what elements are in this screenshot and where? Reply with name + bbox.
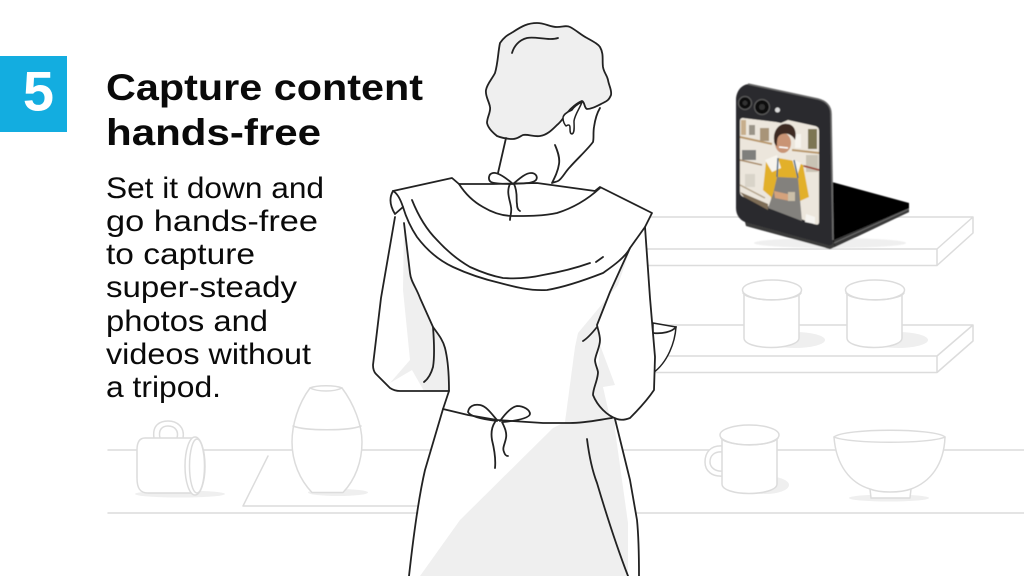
icon: can right bbox=[846, 280, 928, 348]
phone back panel bbox=[736, 84, 833, 245]
phone cover screen photo bbox=[740, 118, 819, 225]
body text: Set it down and bbox=[106, 172, 324, 205]
icon: vase bbox=[292, 386, 368, 496]
title: hands-free bbox=[106, 112, 321, 153]
body text: videos without bbox=[106, 338, 312, 371]
sleeve and torso lines bbox=[373, 217, 449, 391]
body text: to capture bbox=[106, 238, 255, 271]
collar inner neck curve bbox=[459, 184, 600, 216]
step number badge bbox=[0, 56, 67, 132]
hair bbox=[486, 23, 611, 139]
phone lower half bbox=[830, 182, 909, 248]
table with shelves bbox=[108, 217, 1024, 513]
neck bow bbox=[489, 173, 537, 220]
illustration: woman from behind bbox=[373, 23, 676, 576]
body text: photos and bbox=[106, 305, 268, 338]
dress shading bbox=[420, 250, 630, 576]
icon: mug bbox=[705, 425, 789, 494]
collar fold bbox=[391, 191, 603, 278]
neck and ear lines bbox=[498, 108, 600, 183]
title bbox=[106, 67, 423, 153]
collar bbox=[393, 178, 652, 290]
woman in photo bbox=[763, 158, 809, 218]
icon: can left bbox=[742, 280, 825, 348]
ear bbox=[563, 102, 582, 134]
photo: phone on shelf bbox=[736, 84, 909, 249]
neck bbox=[493, 108, 600, 183]
phone hinge and base bbox=[736, 208, 835, 249]
dress body bbox=[373, 178, 655, 576]
small bowl held bbox=[653, 323, 676, 373]
phone cameras bbox=[738, 96, 780, 114]
waist bow bbox=[468, 405, 530, 468]
body text: go hands-free bbox=[106, 205, 318, 238]
icon: bowl bbox=[834, 430, 945, 502]
hair strand bbox=[512, 38, 558, 53]
icon: tipped mug bbox=[135, 421, 225, 498]
step number badge: 5 bbox=[23, 60, 54, 122]
title: Capture content bbox=[106, 67, 423, 108]
body text: super-steady bbox=[106, 271, 297, 304]
body text bbox=[106, 172, 324, 404]
body text: a tripod. bbox=[106, 371, 221, 404]
